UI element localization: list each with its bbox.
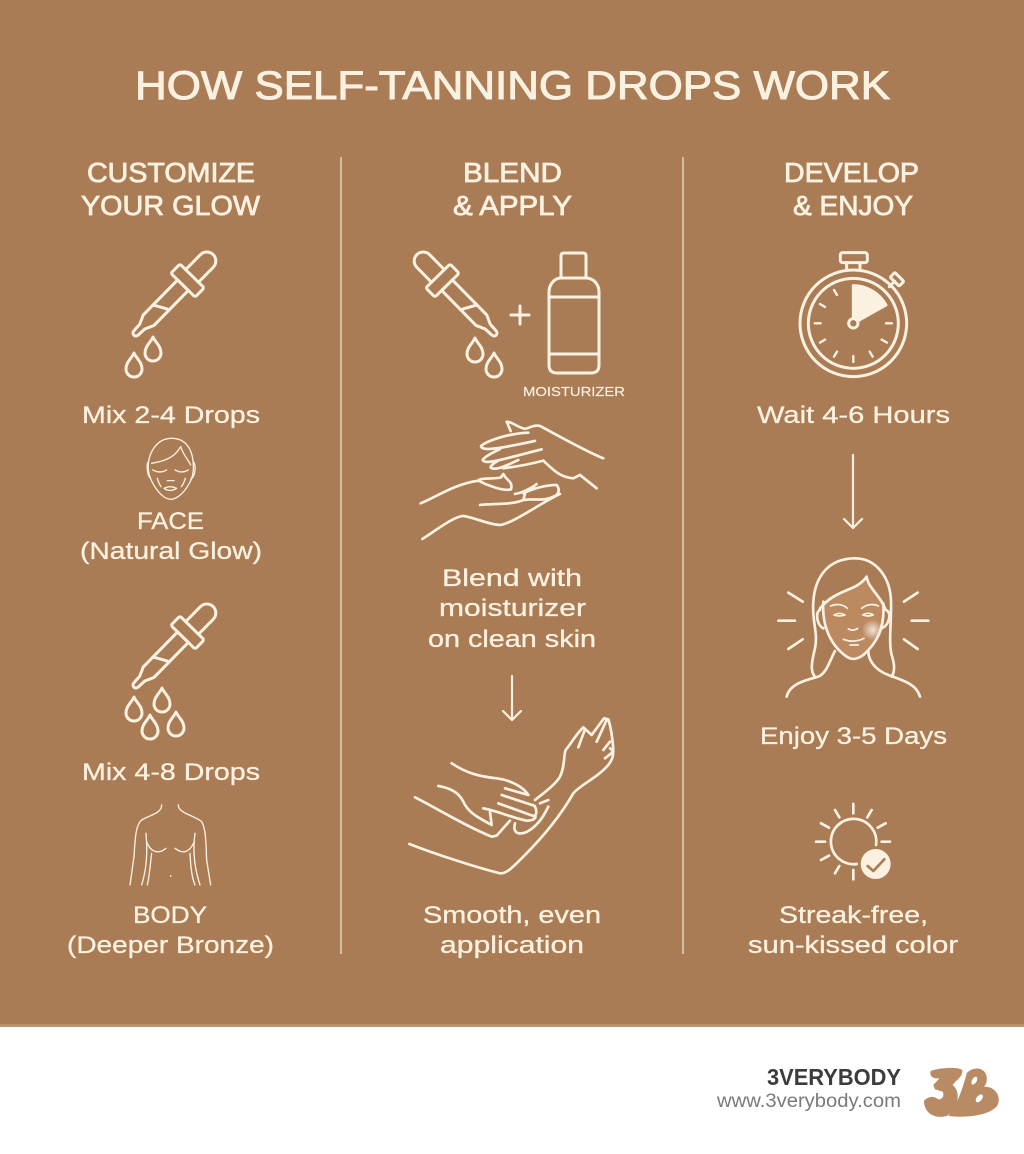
arrow: down [844, 455, 862, 528]
icon: dropper with two drops [122, 243, 225, 377]
icon: glowing face [778, 558, 928, 697]
label: body deeper bronze: BODY [133, 902, 207, 929]
label: enjoy 3-5 days: Enjoy 3-5 Days [760, 723, 947, 750]
label: blend with moisturizer: on clean skin [428, 626, 596, 653]
footer brand [716, 1064, 999, 1117]
icon: stopwatch [800, 253, 907, 377]
heading: develop and enjoy: DEVELOP [784, 157, 919, 188]
heading: blend and apply [453, 157, 572, 221]
label: body deeper bronze: (Deeper Bronze) [67, 932, 274, 959]
brand name: 3VERYBODY [767, 1064, 901, 1090]
label: face natural glow: FACE [137, 508, 204, 535]
panel: develop and enjoy [748, 157, 958, 959]
label: mix 4-8 drops: Mix 4-8 Drops [82, 759, 260, 786]
label: blend with moisturizer: moisturizer [439, 595, 586, 622]
label: blend with moisturizer [428, 565, 596, 653]
heading: customize your glow [81, 157, 261, 221]
label: smooth even application: Smooth, even [423, 902, 601, 929]
label: blend with moisturizer: Blend with [442, 565, 582, 592]
label: wait 4-6 hours: Wait 4-6 Hours [757, 402, 950, 429]
heading: customize your glow: CUSTOMIZE [87, 157, 255, 188]
title: HOW SELF-TANNING DROPS WORK [135, 64, 890, 108]
icon: sun with check [816, 804, 891, 879]
label: body deeper bronze [67, 902, 274, 959]
label: streak-free sun-kissed color: Streak-free, [779, 902, 928, 929]
label: streak-free sun-kissed color: sun-kissed color [748, 932, 958, 959]
arrow: down [503, 676, 521, 720]
heading: blend and apply: & APPLY [453, 190, 572, 221]
heading: develop and enjoy: & ENJOY [793, 190, 913, 221]
icon: body torso [130, 805, 211, 885]
label: smooth even application [423, 902, 601, 959]
heading: blend and apply: BLEND [463, 157, 562, 188]
icon: hands blending [421, 422, 603, 539]
icon: dropper plus moisturizer bottle [405, 243, 625, 399]
icon: hand smoothing arm [409, 718, 613, 873]
heading: develop and enjoy [784, 157, 919, 221]
icon: face [147, 438, 195, 499]
label: moisturizer: MOISTURIZER [523, 384, 625, 399]
panel: customize your glow [67, 157, 274, 959]
panel: blend and apply [405, 157, 625, 959]
label: smooth even application: application [440, 932, 584, 959]
label: mix 2-4 drops: Mix 2-4 Drops [82, 402, 260, 429]
logo: 3B [924, 1068, 999, 1117]
label: face natural glow [80, 508, 262, 565]
label: face natural glow: (Natural Glow) [80, 538, 262, 565]
icon: dropper with four drops [122, 595, 225, 739]
brand url: www.3verybody.com [716, 1091, 901, 1112]
label: streak-free sun-kissed color [748, 902, 958, 959]
heading: customize your glow: YOUR GLOW [81, 190, 261, 221]
